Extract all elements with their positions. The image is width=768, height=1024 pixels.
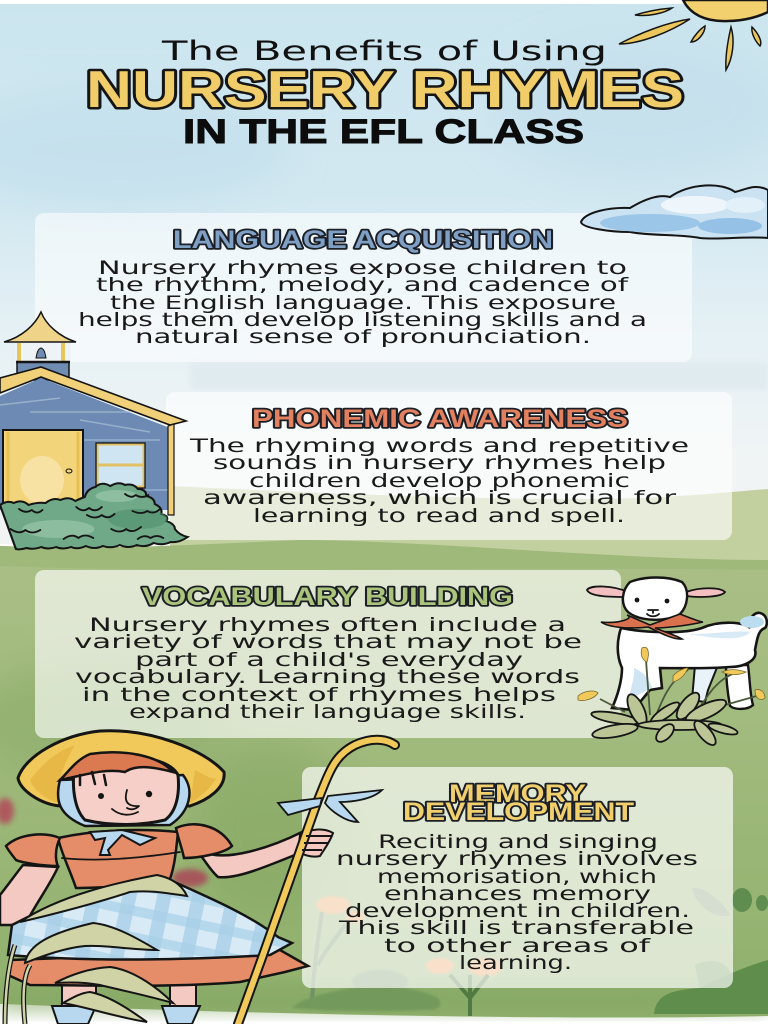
- dandelion plant: [600, 660, 760, 718]
- bodice: [58, 830, 178, 888]
- text block: phonemic awareness body: [188, 435, 689, 527]
- title line: in the efl class: IN THE EFL CLASS: [183, 113, 584, 151]
- sleeves: [6, 834, 60, 866]
- decoration: faded flowers and bushes behind memory panel: [292, 888, 768, 1016]
- icon: girl with staff: [0, 731, 395, 1024]
- text block: memory development body: This skill is transferable: [337, 917, 694, 939]
- heading: vocabulary building: VOCABULARY BUILDING: [142, 583, 513, 611]
- text block: phonemic awareness body: sounds in nursery rhymes help: [213, 452, 666, 474]
- head: [623, 578, 687, 620]
- text block: memory development body: Reciting and singing: [378, 831, 658, 853]
- window: [97, 444, 144, 487]
- hand fingers: [302, 836, 332, 850]
- title line: the benefits of using: The Benefits of Using: [160, 36, 607, 67]
- text block: language acquisition body: Nursery rhymes expose children to: [98, 257, 627, 279]
- staff bow: [278, 790, 382, 822]
- text block: language acquisition body: the English language. This exposure: [110, 292, 616, 314]
- eyes: [98, 793, 104, 799]
- panel: phonemic awareness: [166, 392, 732, 540]
- text block: memory development body: memorisation, which: [377, 866, 657, 888]
- icon: cloud: [581, 185, 768, 239]
- hair: [60, 752, 173, 780]
- back legs: [692, 665, 718, 702]
- skirt: [8, 880, 292, 960]
- icon: schoolhouse: [0, 312, 188, 549]
- title block: [86, 36, 684, 151]
- text block: memory development body: learning.: [459, 952, 572, 974]
- text block: memory development body: nursery rhymes involves: [336, 848, 698, 870]
- skirt underlayer: [8, 950, 308, 986]
- text block: phonemic awareness body: children develop phonemic: [249, 470, 630, 492]
- panel: language acquisition: [35, 213, 692, 362]
- text block: vocabulary building body: [74, 614, 582, 723]
- heading: phonemic awareness: PHONEMIC AWARENESS: [252, 405, 628, 433]
- legs and socks: [62, 982, 96, 1007]
- dandelion leaves: [590, 689, 739, 748]
- text block: memory development body: enhances memory: [384, 883, 651, 905]
- text block: vocabulary building body: expand their language skills.: [129, 701, 526, 723]
- text block: vocabulary building body: part of a child's everyday: [135, 649, 523, 671]
- panel: memory development: [302, 767, 733, 988]
- panel: vocabulary building: [35, 570, 621, 738]
- icon: lamb: [578, 578, 767, 748]
- bonnet: [58, 775, 189, 826]
- foreground leaves: [20, 875, 187, 922]
- icon: sun: [619, 0, 768, 70]
- heading: memory development: [403, 780, 634, 826]
- text block: vocabulary building body: variety of words that may not be: [74, 631, 582, 653]
- body: [612, 613, 767, 710]
- text block: memory development body: development in children.: [345, 900, 690, 922]
- text block: language acquisition body: helps them develop listening skills and a: [78, 309, 647, 331]
- cupola roof: [4, 312, 76, 342]
- decoration: red flower blotches: [0, 798, 208, 887]
- text block: language acquisition body: natural sense of pronunciation.: [135, 326, 591, 348]
- text block: phonemic awareness body: learning to read and spell.: [253, 505, 625, 527]
- heading: language acquisition: LANGUAGE ACQUISITION: [173, 226, 553, 254]
- right arm: [200, 832, 308, 877]
- heading: memory development: MEMORY: [449, 780, 586, 808]
- hat: [18, 731, 224, 806]
- left arm: [0, 865, 58, 925]
- text block: phonemic awareness body: The rhyming words and repetitive: [188, 435, 689, 457]
- text block: language acquisition body: [78, 257, 647, 348]
- text block: vocabulary building body: Nursery rhymes often include a: [89, 614, 566, 636]
- text block: vocabulary building body: in the context of rhymes helps: [82, 684, 556, 706]
- staff: [238, 740, 395, 1024]
- text block: vocabulary building body: vocabulary. Learning these words: [75, 666, 580, 688]
- text block: memory development body: to other areas of: [384, 935, 652, 957]
- ears: [587, 586, 628, 597]
- text block: phonemic awareness body: awareness, which is crucial for: [203, 487, 676, 509]
- text block: memory development body: [336, 831, 698, 974]
- door: [3, 430, 83, 506]
- bush: [0, 483, 188, 549]
- background: hills and meadow: [0, 486, 768, 1018]
- text block: language acquisition body: the rhythm, melody, and cadence of: [96, 274, 630, 296]
- bandana: [601, 614, 703, 639]
- face: [73, 756, 178, 824]
- wall: [0, 378, 170, 510]
- nose and smile: [112, 790, 139, 815]
- roof trim: [0, 367, 186, 425]
- title line: nursery rhymes: NURSERY RHYMES: [86, 61, 684, 119]
- cupola tower: [17, 362, 69, 380]
- bell: [36, 348, 46, 358]
- heading: memory development: DEVELOPMENT: [403, 798, 634, 826]
- neck bow: [90, 830, 155, 855]
